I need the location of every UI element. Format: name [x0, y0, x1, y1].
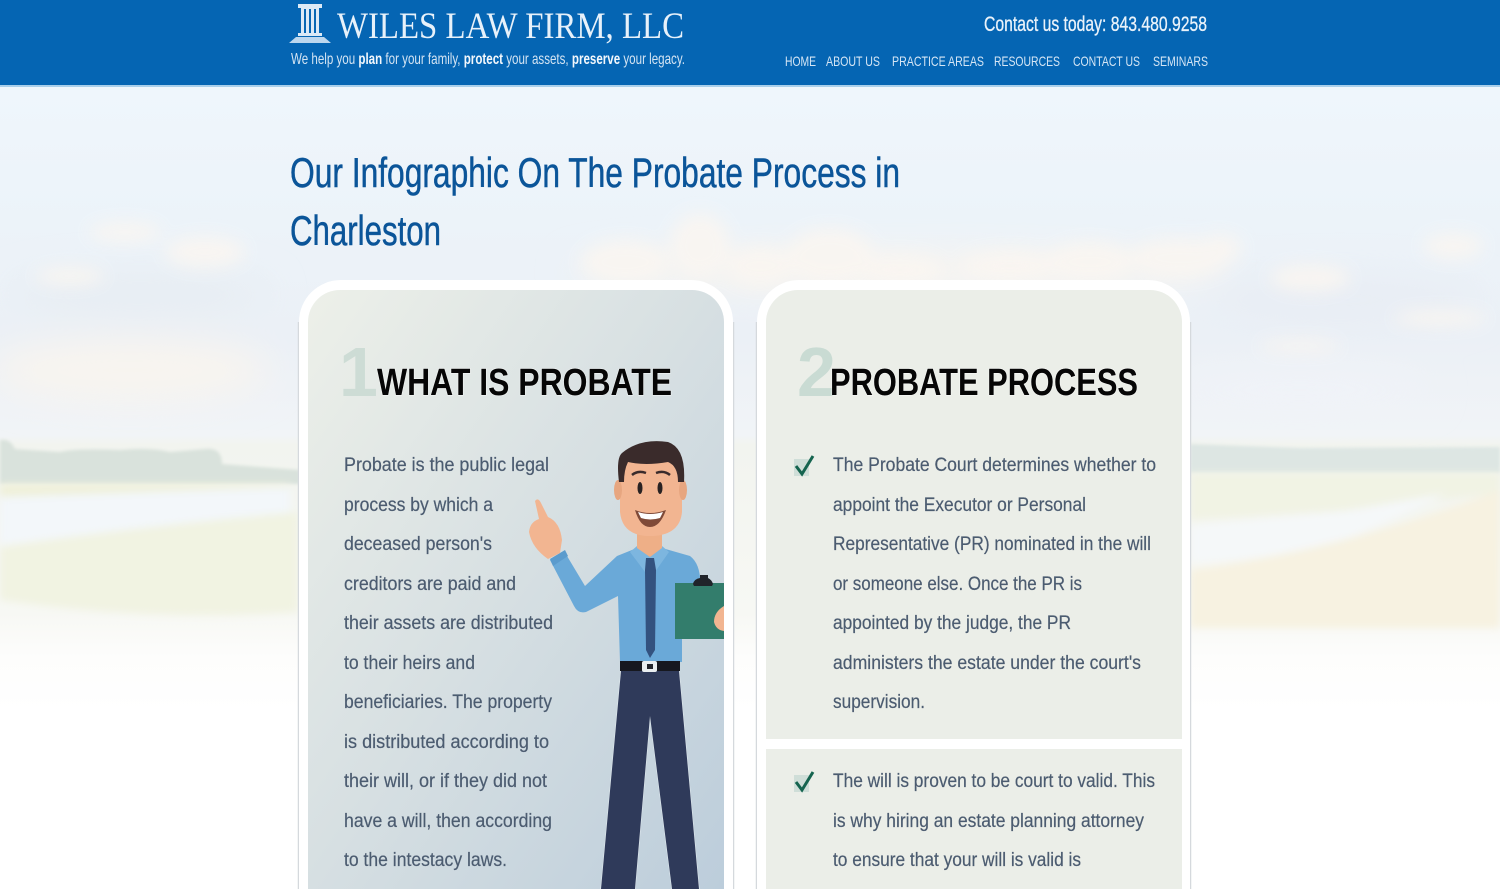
text block: step 1: administers the estate under the court's: [833, 653, 1141, 674]
text block: step 1: supervision.: [833, 692, 925, 713]
head: [620, 460, 682, 536]
text block: step 2: to ensure that your will is valid is: [833, 850, 1081, 871]
header bar: [0, 0, 1500, 87]
step 2 checklist item: [794, 771, 1155, 871]
number 1: 1: [339, 333, 378, 411]
firm name: WILES LAW FIRM, LLC: [337, 6, 684, 47]
panel: probate process: [756, 280, 1190, 889]
illustration: man with clipboard: [529, 441, 724, 889]
text block: step 2: The will is proven to be court to valid. This: [833, 771, 1155, 792]
tagline: We help you plan for your family, protect your assets, preserve your legacy.: [291, 51, 685, 68]
navigation menu: SEMINARS: [1153, 53, 1208, 69]
eyebrows, eyes and smile: [632, 472, 670, 475]
text block: probate definition: their assets are distributed: [344, 613, 553, 634]
navigation menu: PRACTICE AREAS: [892, 53, 984, 69]
navigation menu: ABOUT US: [826, 53, 880, 69]
icon: check mark: [794, 772, 813, 792]
text block: probate definition: Probate is the public legal: [344, 455, 549, 476]
icon: column logo: [289, 4, 331, 43]
text block: step 1: or someone else. Once the PR is: [833, 574, 1082, 595]
clipboard: [675, 583, 724, 639]
page title: Charleston: [290, 207, 441, 254]
holding hand: [714, 606, 724, 631]
heading: probate process: PROBATE PROCESS: [830, 362, 1138, 404]
text block: probate definition: process by which a: [344, 495, 493, 516]
text block: probate definition: to the intestacy laws.: [344, 850, 507, 871]
text block: probate definition: deceased person's: [344, 534, 492, 555]
heading: what is probate: WHAT IS PROBATE: [377, 362, 672, 404]
text block: step 2: is why hiring an estate planning attorney: [833, 811, 1144, 832]
text block: step 1: appoint the Executor or Personal: [833, 495, 1086, 516]
pointing hand: [529, 499, 562, 559]
text block: probate definition: beneficiaries. The property: [344, 692, 552, 713]
navigation menu: [785, 53, 1208, 69]
navigation menu: RESOURCES: [994, 53, 1060, 69]
trousers: [601, 671, 699, 889]
step 1 checklist item: [794, 455, 1156, 713]
hair: [618, 441, 684, 482]
panel: what is probate: [298, 280, 734, 889]
text block: probate definition: to their heirs and: [344, 653, 475, 674]
shirt and arm: [550, 548, 700, 662]
text block: probate definition: is distributed according to: [344, 732, 549, 753]
neck: [637, 534, 662, 557]
text block: step 1: The Probate Court determines whether to: [833, 455, 1156, 476]
text block: probate definition: their will, or if they did not: [344, 771, 548, 792]
belt: [620, 661, 680, 671]
text block: step 1: appointed by the judge, the PR: [833, 613, 1071, 634]
text block: probate definition: creditors are paid and: [344, 574, 516, 595]
contact phone: Contact us today: 843.480.9258: [984, 13, 1207, 36]
page title: Our Infographic On The Probate Process in: [290, 149, 900, 196]
navigation menu: CONTACT US: [1073, 53, 1140, 69]
icon: check mark: [794, 456, 813, 476]
page title: [290, 149, 900, 254]
tie: [645, 558, 656, 658]
text block: probate definition: have a will, then according: [344, 811, 552, 832]
text block: step 2: [833, 771, 1155, 871]
text block: step 1: [833, 455, 1156, 713]
navigation menu: HOME: [785, 53, 816, 69]
text block: step 1: Representative (PR) nominated in the will: [833, 534, 1151, 555]
number 2: 2: [797, 333, 836, 411]
text block: probate definition: [344, 455, 553, 871]
